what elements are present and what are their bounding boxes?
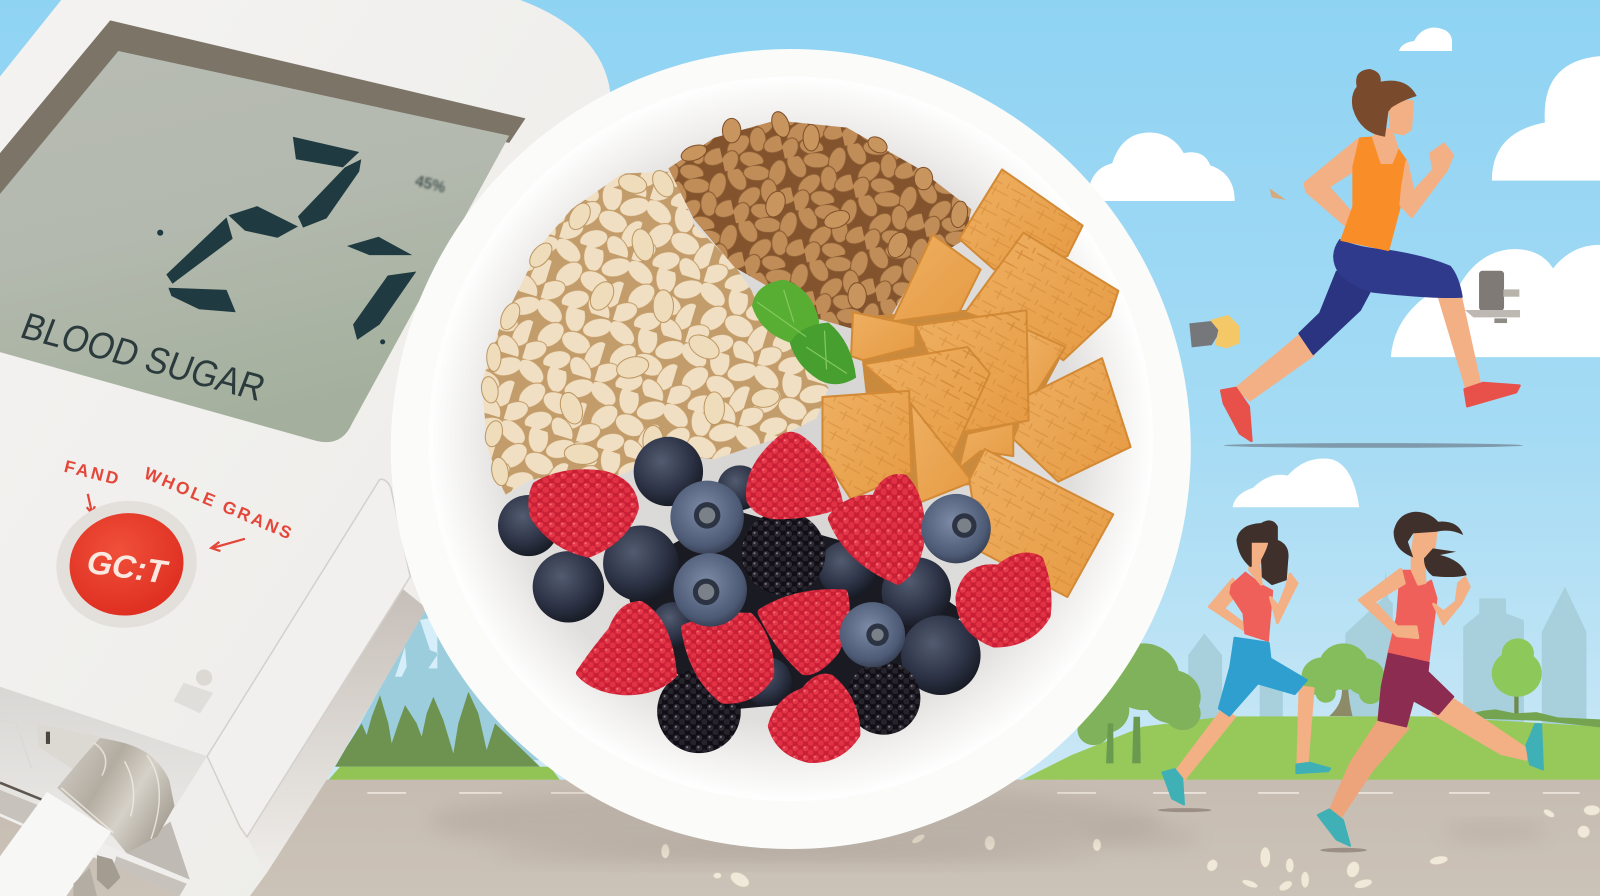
back shoe (1318, 809, 1350, 846)
blood sugar meter (0, 0, 610, 896)
head and neck (1412, 527, 1436, 584)
road lane dashes (367, 792, 1580, 794)
blueberry with crown (670, 481, 744, 554)
cloud: top small (1399, 28, 1452, 51)
back lower leg (1176, 710, 1235, 780)
blueberry with crown (840, 602, 905, 667)
grass: left strip (328, 767, 560, 780)
cracker gaps (857, 306, 1066, 490)
front lower leg (1298, 687, 1313, 763)
runner: lower left (1162, 521, 1330, 804)
hair (1352, 69, 1417, 137)
skyline: left (340, 610, 553, 760)
park trees (1078, 638, 1600, 763)
back arm (1359, 569, 1418, 638)
mint leaves (752, 280, 856, 384)
LCD label: blood sugar: BLOOD SUGAR (15, 306, 271, 410)
label: fand: FAND (62, 456, 121, 489)
back shoe (1162, 769, 1184, 804)
tree: middle (1301, 643, 1385, 716)
crackers (822, 169, 1131, 597)
meter side panel (207, 479, 410, 837)
front arm (1401, 144, 1453, 217)
grains: brown wheat (668, 109, 971, 329)
trailing leg (1433, 700, 1526, 759)
left faint panel line (0, 719, 32, 768)
front arm (1270, 574, 1297, 623)
shorts (1219, 638, 1307, 716)
cloud: lower (1233, 459, 1359, 507)
neck and chest (1373, 127, 1397, 163)
shorts (1379, 652, 1453, 726)
leaf veins (757, 290, 847, 374)
LCD screen (0, 51, 509, 442)
bowl (391, 49, 1191, 849)
skyline highlights (395, 617, 438, 677)
head (1388, 100, 1413, 134)
cable (0, 792, 111, 896)
tree: right (1492, 638, 1542, 717)
back arm (1305, 139, 1373, 232)
LCD frame (0, 20, 526, 200)
bowl rim (391, 49, 1191, 849)
back leg (1331, 720, 1408, 817)
grass: right field (1020, 716, 1600, 781)
cloud: middle right (1391, 245, 1600, 357)
tank top (1341, 137, 1406, 250)
bowl shadow (429, 787, 1163, 856)
shadows (1158, 808, 1367, 852)
meter lower face (0, 687, 207, 853)
shirt (1389, 571, 1436, 661)
button ring (46, 490, 207, 639)
chip (1269, 188, 1286, 200)
hedge (1470, 709, 1600, 727)
cracker pieces (822, 169, 1131, 597)
hair (1238, 521, 1287, 584)
arrow: fand (87, 494, 95, 513)
flying device (1465, 271, 1520, 323)
flying snack (1189, 315, 1240, 348)
wheat edge grains (679, 109, 970, 309)
blueberry with crown (673, 553, 747, 627)
front shoe (1296, 763, 1330, 773)
leaf: upper (752, 280, 819, 343)
LCD digits (157, 137, 416, 344)
grains: light oats (479, 167, 829, 495)
cable connector (57, 738, 174, 853)
blueberries: back (498, 437, 981, 706)
trunks (1106, 717, 1141, 763)
pine trees (335, 692, 540, 767)
blueberry with crown (921, 494, 991, 563)
bowl basin (429, 77, 1153, 801)
head and neck (1250, 542, 1271, 584)
meter seam (0, 783, 43, 800)
back lower leg (1236, 335, 1313, 400)
shirt (1230, 573, 1272, 641)
left scenery (328, 610, 560, 780)
back shoe (1221, 388, 1251, 441)
oat edge grains (479, 167, 781, 487)
connector screw (73, 855, 120, 896)
button cap (61, 504, 192, 625)
meter vent hole (173, 669, 213, 713)
cloud: upper right (1492, 56, 1600, 181)
back arm (1209, 579, 1256, 632)
flowing hair (1424, 548, 1467, 577)
port recess (127, 822, 190, 880)
meter slot (37, 724, 100, 769)
button label: GC:T (85, 543, 172, 591)
road (0, 780, 1600, 896)
blackberries (657, 511, 920, 753)
road shadows (490, 822, 1546, 867)
meter lower trim (0, 790, 187, 896)
runner: lower right (1158, 512, 1543, 852)
back thigh (1299, 272, 1371, 354)
oats on road (661, 805, 1600, 893)
button (46, 490, 207, 639)
cloud: left (1088, 133, 1235, 201)
dark gap under berries (622, 510, 964, 709)
clouds (1088, 28, 1600, 507)
meter right strip (247, 587, 427, 874)
ground shadow (1223, 443, 1523, 448)
arrow: whole grains (211, 539, 245, 551)
trailing shoe (1526, 724, 1543, 769)
meter body (0, 0, 610, 896)
cracker texture (822, 169, 1131, 597)
skyline: right (1188, 570, 1586, 727)
front lower leg (1439, 295, 1479, 388)
LCD percent reading: 45% (413, 173, 448, 197)
tree: large left (1078, 643, 1201, 745)
blueberries: front (670, 481, 991, 667)
raspberries (533, 436, 1047, 759)
front shoe (1465, 383, 1519, 406)
hips and front thigh (1334, 240, 1462, 297)
front arm (1434, 578, 1469, 624)
leaf: lower (790, 322, 856, 384)
label: whole grains: WHOLE GRANS (141, 463, 295, 543)
runner: top (1189, 69, 1523, 448)
hair (1394, 512, 1463, 557)
